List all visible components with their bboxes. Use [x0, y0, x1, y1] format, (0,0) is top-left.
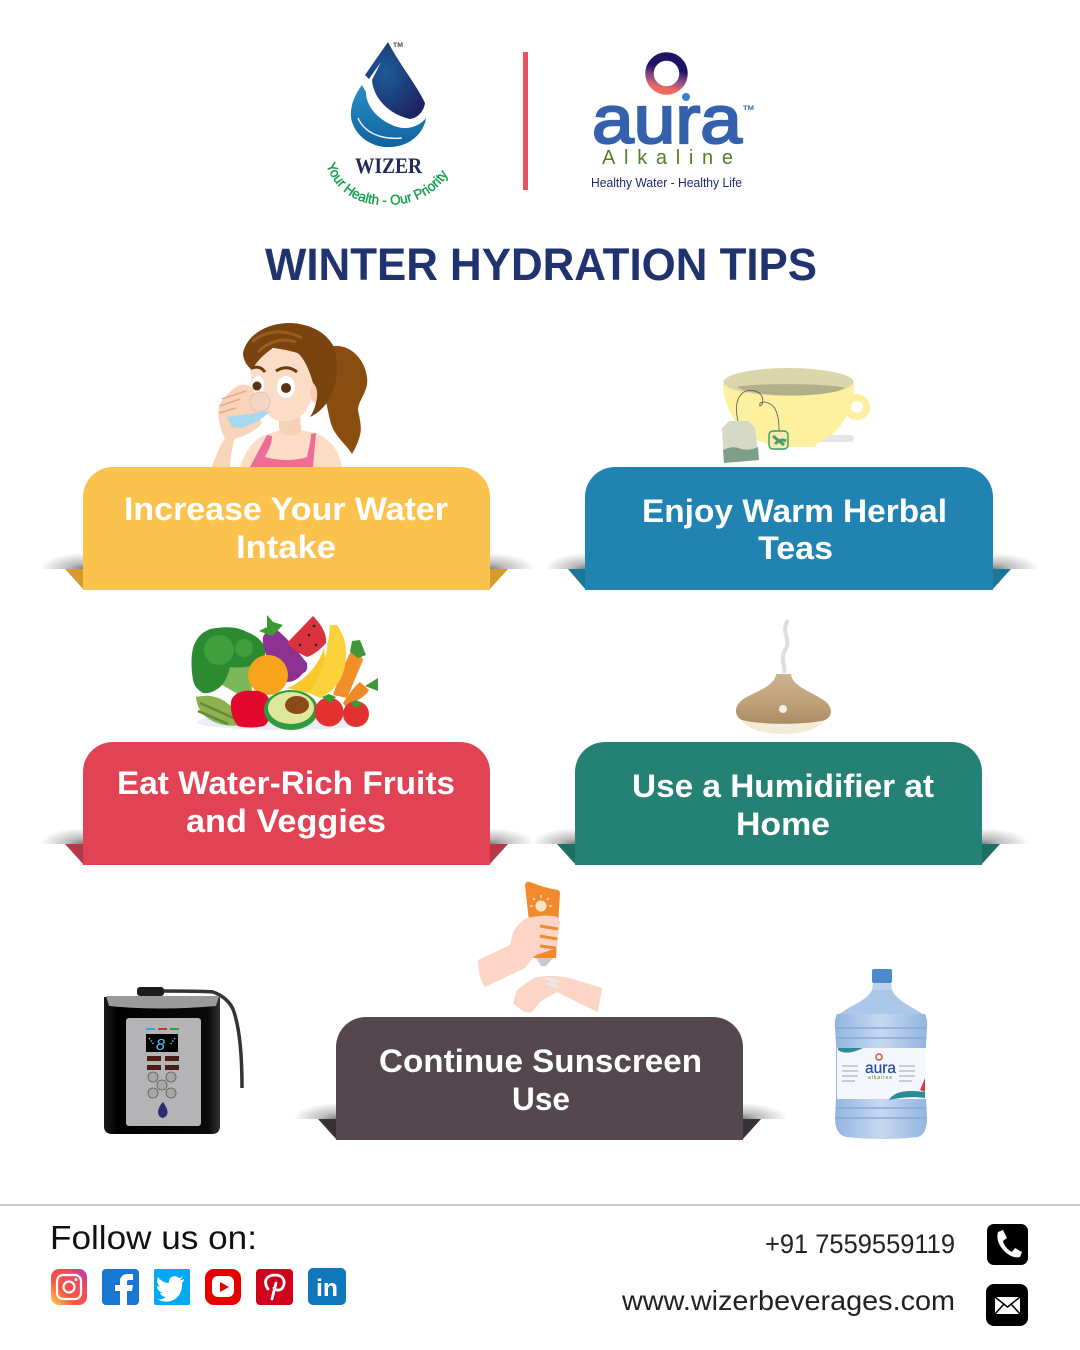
- product: water ioniser: [104, 987, 242, 1134]
- control buttons: [148, 1072, 176, 1098]
- fold left: [318, 1119, 337, 1140]
- icon: ring: [650, 56, 684, 90]
- product: water bottle: [835, 969, 927, 1139]
- body: [835, 1014, 927, 1139]
- logo: Aura Alkaline: [591, 56, 754, 190]
- label line 1: Increase Your Water: [124, 491, 448, 527]
- apple: [231, 691, 271, 728]
- neck: [871, 982, 893, 1002]
- illustration: applying sunscreen: [478, 882, 602, 1013]
- fold left: [65, 569, 84, 590]
- indicator bars: [147, 1056, 179, 1070]
- label line 1: Continue Sunscreen: [379, 1043, 702, 1079]
- icon: facebook: [102, 1269, 139, 1305]
- icon: youtube: [205, 1269, 241, 1305]
- banner: sunscreen: [293, 1017, 788, 1140]
- wordmark: aura: [592, 82, 742, 158]
- icon: phone: [987, 1224, 1028, 1265]
- label line 2: Teas: [758, 530, 833, 566]
- panel: [83, 467, 490, 590]
- eyebrows: [252, 367, 297, 372]
- ear: [310, 382, 326, 404]
- face: [250, 349, 314, 421]
- cup: [723, 384, 854, 447]
- banner: humidifier: [532, 742, 1030, 865]
- logo: Wizer: [327, 42, 448, 205]
- label line 2: Intake: [236, 529, 336, 565]
- title: WINTER HYDRATION TIPS: [265, 239, 817, 290]
- front panel: [126, 1018, 201, 1126]
- tag: [769, 431, 788, 449]
- eggplant: [263, 629, 307, 682]
- string: [736, 390, 779, 431]
- bananas: [287, 648, 327, 693]
- fold left: [568, 569, 586, 590]
- shadow right: [993, 553, 1040, 569]
- icon: twitter: [154, 1269, 190, 1305]
- eyes: [252, 376, 264, 394]
- label line 2: and Veggies: [186, 803, 386, 839]
- website: www.wizerbeverages.com: [621, 1285, 955, 1316]
- panel: [585, 467, 993, 590]
- shadow right: [982, 828, 1030, 844]
- fold left: [557, 844, 576, 865]
- fold right: [981, 844, 1000, 865]
- shadow left: [532, 828, 575, 844]
- display: [146, 1034, 178, 1052]
- icon: dot: [682, 93, 690, 101]
- hair: [243, 323, 337, 417]
- phone number: +91 7559559119: [765, 1229, 955, 1259]
- button: [779, 705, 787, 713]
- broccoli crown: [192, 627, 265, 693]
- label line 1: Eat Water-Rich Fruits: [117, 765, 455, 801]
- shadow left: [293, 1103, 336, 1119]
- icon: linkedin: in: [316, 1275, 338, 1302]
- footer: contact: [621, 1224, 1028, 1326]
- tagline: [326, 165, 453, 205]
- top cap: [106, 996, 219, 1008]
- tank top: [250, 433, 316, 467]
- orange: [248, 655, 288, 695]
- base: [740, 716, 827, 734]
- label wave: [889, 1091, 925, 1100]
- glass: [250, 392, 270, 412]
- led strip: [146, 1028, 155, 1030]
- shadow right: [490, 828, 535, 844]
- saucer shadow: [800, 435, 854, 442]
- banner: water intake: [40, 467, 535, 590]
- footer: follow us: [50, 1219, 346, 1305]
- mist: [783, 620, 788, 673]
- broccoli stem: [222, 665, 252, 694]
- fold right: [489, 844, 508, 865]
- body: [104, 997, 220, 1134]
- fold right: [992, 569, 1011, 590]
- subbrand: Alkaline: [602, 147, 733, 169]
- mini logo: [158, 1102, 168, 1118]
- shoulders and chest: [240, 430, 342, 467]
- tube: [525, 882, 560, 958]
- panel: [575, 742, 982, 865]
- illustration: humidifier: [736, 620, 831, 734]
- shoulder: [836, 990, 926, 1016]
- footer rule: [0, 1204, 1080, 1206]
- ground shadow: [197, 714, 369, 730]
- banner: fruits and veggies: [40, 742, 535, 865]
- label line 1: Enjoy Warm Herbal: [642, 493, 947, 529]
- avocado: [264, 690, 318, 730]
- follow heading: Follow us on:: [50, 1219, 257, 1256]
- product: water ioniser: 8: [156, 1037, 165, 1054]
- teabag: [722, 421, 759, 463]
- label subbrand: alkaline: [868, 1075, 892, 1081]
- cream: [545, 978, 558, 987]
- fold right: [489, 569, 508, 590]
- label details: [842, 1066, 915, 1081]
- sun logo: [536, 900, 546, 912]
- label ring: [876, 1054, 882, 1060]
- handle: [848, 398, 866, 416]
- body: [736, 674, 831, 724]
- cable: [160, 991, 242, 1088]
- panel: [83, 742, 490, 865]
- slogan: Healthy Water - Healthy Life: [591, 176, 742, 190]
- carrots: [343, 682, 369, 707]
- shadow left: [40, 553, 83, 569]
- fold right: [742, 1119, 761, 1140]
- icon: mail: [986, 1284, 1028, 1326]
- shadow right: [743, 1103, 788, 1119]
- illustration: girl drinking water: [212, 323, 367, 467]
- shadow left: [40, 828, 83, 844]
- cap: [872, 969, 892, 983]
- trademark: TM: [393, 42, 403, 49]
- divider: [523, 52, 528, 190]
- illustration: herbal tea cup: [722, 368, 866, 463]
- wordmark: WIZER: [355, 153, 423, 178]
- panel: [336, 1017, 743, 1140]
- icon: water drop: [351, 42, 426, 147]
- label: [837, 1048, 926, 1099]
- hand: [218, 385, 262, 440]
- lower hand: [513, 976, 602, 1013]
- label line 2: Home: [736, 806, 830, 842]
- label line 2: Use: [512, 1081, 570, 1117]
- ribs: [836, 1028, 926, 1118]
- neck: [279, 414, 301, 436]
- icon: pinterest: [256, 1269, 293, 1305]
- trademark: TM: [743, 105, 754, 112]
- forearm: [212, 438, 235, 467]
- watermelon: [287, 616, 326, 657]
- label brand: aura: [865, 1060, 896, 1077]
- illustration: fruits and vegetables: [192, 615, 378, 730]
- ponytail: [322, 346, 367, 454]
- fold left: [65, 844, 84, 865]
- shadow left: [545, 553, 586, 569]
- zucchini: [196, 696, 242, 726]
- logo: Wizer: Your Health - Our Priority: [327, 161, 448, 205]
- tomatoes: [314, 698, 344, 726]
- icon: instagram: [51, 1269, 87, 1305]
- upper hand: [478, 916, 560, 987]
- shadow right: [490, 553, 535, 569]
- icon: linkedin: [308, 1268, 346, 1305]
- banner: herbal teas: [545, 467, 1040, 590]
- label line 1: Use a Humidifier at: [632, 768, 934, 804]
